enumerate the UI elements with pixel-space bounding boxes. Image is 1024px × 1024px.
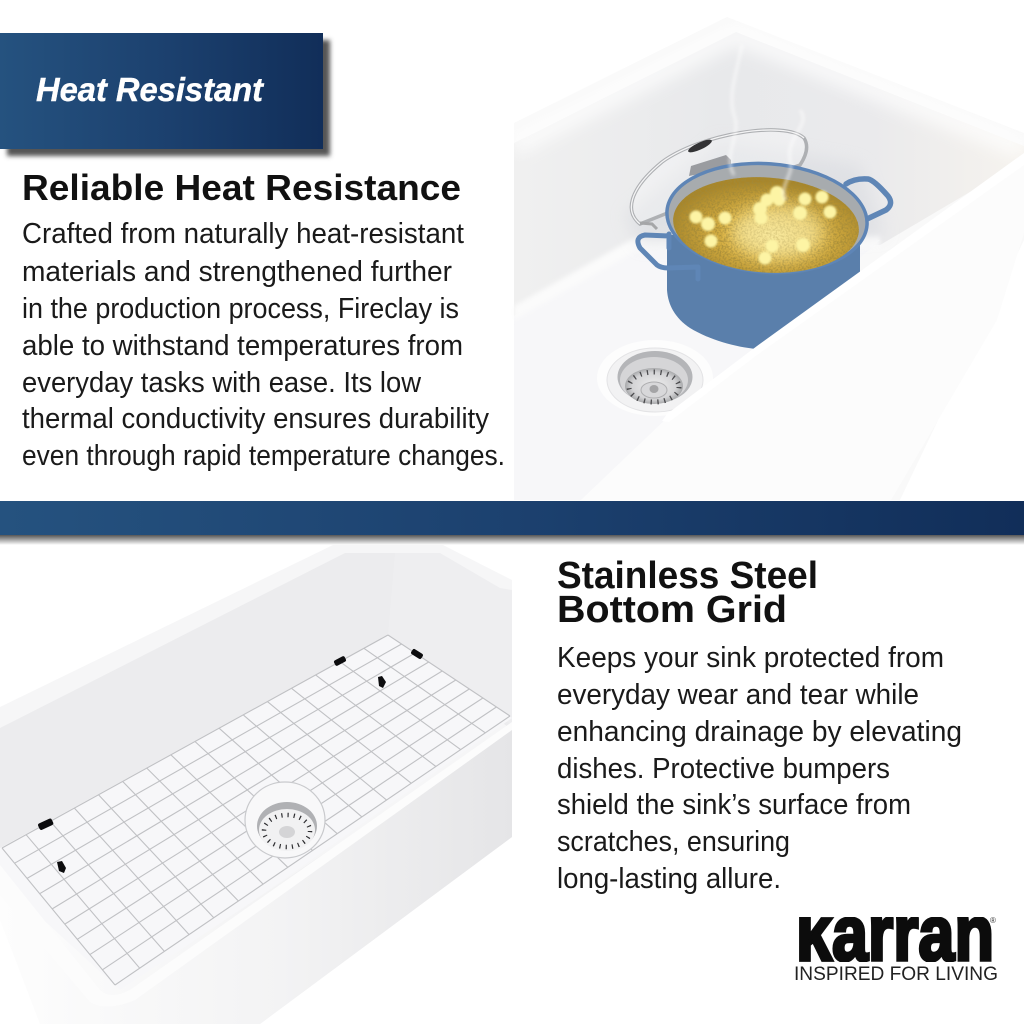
text block: bottom grid description: dishes. Protective bumpers	[557, 753, 890, 785]
sink basin floor	[514, 240, 880, 500]
text block: bottom grid description: everyday wear and tear while	[557, 679, 919, 711]
pot right handle	[846, 179, 891, 219]
pot left handle	[638, 234, 698, 279]
banner: Heat Resistant	[0, 33, 330, 156]
drain with grid cut-out	[245, 782, 325, 858]
logo: karran: ®	[990, 916, 996, 925]
text block: bottom grid description: Keeps your sink protected from	[557, 642, 944, 674]
heading: Stainless Steel Bottom Grid: Stainless Steel	[557, 555, 818, 597]
text block: bottom grid description: enhancing drainage by elevating	[557, 716, 962, 748]
logo: karran	[796, 917, 997, 980]
sink front apron	[0, 728, 512, 1024]
basin floor	[0, 635, 512, 995]
dumplings	[690, 186, 836, 264]
boiling food surface	[670, 171, 862, 279]
pot rim and interior	[661, 155, 873, 281]
sink rim and body	[0, 545, 512, 1024]
text block: heat resistance description: Crafted from naturally heat-resistant	[22, 218, 464, 250]
sink inner walls	[0, 553, 512, 848]
heading: Stainless Steel Bottom Grid	[557, 555, 818, 631]
text block: heat resistance description: materials and strengthened further	[22, 256, 452, 288]
heading: Stainless Steel Bottom Grid: Bottom Grid	[557, 589, 787, 631]
pot body	[667, 230, 860, 349]
banner label: Heat Resistant	[36, 71, 265, 108]
panel: bottom sink illustration with grid	[0, 545, 512, 1024]
drain strainer	[597, 340, 713, 416]
text block: heat resistance description: able to withstand temperatures from	[22, 330, 463, 362]
text block: bottom grid description: scratches, ensuring	[557, 826, 790, 858]
pot lid	[631, 130, 807, 229]
divider band	[0, 501, 1024, 545]
pot	[638, 155, 891, 349]
text block: heat resistance description	[22, 218, 505, 472]
text block: heat resistance description: even through rapid temperature changes.	[22, 440, 505, 472]
text block: bottom grid description	[557, 642, 962, 895]
text block: heat resistance description: in the production process, Fireclay is	[22, 293, 459, 325]
panel: top sink illustration	[514, 17, 1024, 500]
protective bumpers	[37, 648, 424, 873]
logo tagline: INSPIRED FOR LIVING	[794, 963, 998, 985]
text block: bottom grid description: long-lasting allure.	[557, 863, 781, 895]
sink back walls	[514, 32, 1024, 320]
stainless steel bottom grid	[2, 635, 510, 985]
heading: Reliable Heat Resistance: Reliable Heat Resistance	[22, 167, 461, 208]
text block: heat resistance description: thermal conductivity ensures durability	[22, 403, 489, 435]
text block: heat resistance description: everyday tasks with ease. Its low	[22, 367, 422, 399]
sink rim	[514, 17, 1024, 500]
sink front apron	[581, 158, 1024, 500]
text block: bottom grid description: shield the sink’s surface from	[557, 789, 911, 821]
steam	[730, 45, 803, 200]
